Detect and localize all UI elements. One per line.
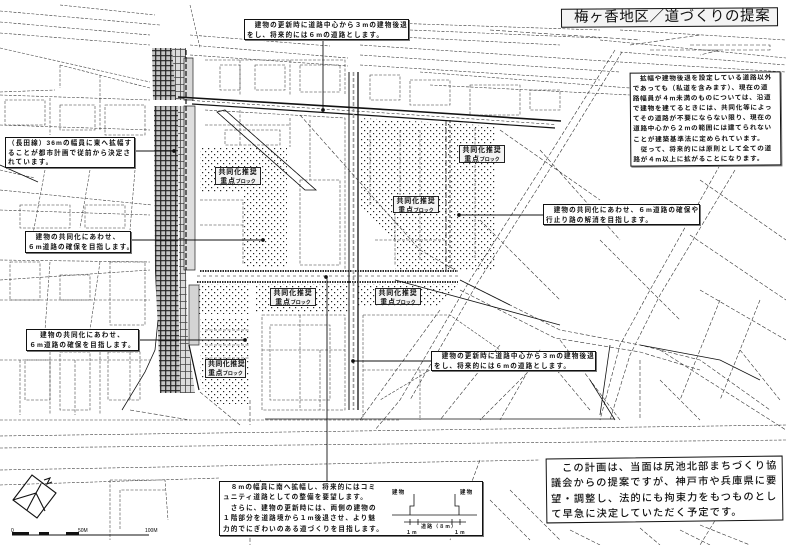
leader lines [131, 39, 543, 481]
callout: top road setback [244, 19, 409, 40]
label: priority block 5: 共同化推奨 [378, 290, 418, 297]
label: priority block 2: 共同化推奨 [462, 147, 502, 154]
label: priority block 2 [459, 145, 505, 163]
callout: lower road setback: をし、将来的には６mの道路とします。 [434, 362, 571, 370]
callout: plan status note: て早急に決定していただく予定です。 [551, 507, 743, 521]
callout: narrow roads rule: 従って、将来的には原則として全ての道 [641, 145, 772, 153]
callout: plan status note: 議会からの提案ですが、神戸市や兵庫県に要 [551, 476, 778, 490]
callout: joint development west lower [26, 329, 139, 351]
callout: joint development west upper [25, 231, 131, 253]
map: east-west upper road [178, 97, 561, 128]
callout: top road setback: 建物の更新時に道路中心から３mの建物後退 [255, 22, 408, 29]
label: priority block 3: 共同化推奨 [396, 198, 436, 205]
map: dotted joint-development zones [199, 118, 496, 404]
scale bar: 50M [78, 528, 88, 534]
label: priority block 3 [393, 196, 439, 213]
callout: joint development west lower: 建物の共同化にあわせ、 [40, 332, 125, 339]
callout: narrow roads rule [630, 71, 781, 167]
callout: narrow roads rule: 道路中心から２mの範囲には建てられない [633, 125, 772, 133]
diagram: road cross-section: 建物 [392, 488, 405, 496]
callout: narrow roads rule: 路が４m以上に拡がることになります。 [633, 155, 764, 163]
scale bar: 100M [145, 528, 158, 534]
callout: narrow roads rule: 拡幅や建物後退を設定している道路以外 [640, 74, 772, 83]
callout: narrow roads rule: ことが建築基準法に定められています。 [633, 135, 765, 143]
label: priority block 4 [270, 288, 316, 306]
callout: Nagata line: ることが都市計画で従前から決定さ [8, 150, 131, 157]
scale bar: 0 [11, 528, 14, 534]
callout: community road with section diagram: １階部分を道路境から１m後退させ、より魅 [223, 515, 376, 522]
map: solid heavy street lines [0, 110, 760, 420]
map: Nagata line wide road band [122, 48, 199, 410]
scale bar [11, 528, 158, 535]
label: priority block 6: 共同化推奨 [208, 361, 245, 368]
callout: joint development west lower: ６m道路の確保を目指します。 [29, 342, 136, 349]
label: priority block 4: 共同化推奨 [274, 290, 312, 297]
callout: lower road setback: 建物の更新時に道路中心から３mの建物後退 [442, 353, 595, 360]
callout: plan status note [546, 456, 783, 523]
callout: community road with section diagram: ８mの幅員に南へ拡幅し、将来的にはコミ [231, 484, 376, 491]
callout: dead-end road: 行止り路の解消を目指します。 [546, 216, 653, 224]
map: east-west lower road [197, 271, 458, 282]
callout: community road with section diagram: ュニティ道路としての整備を要望します。 [223, 494, 368, 501]
icon: north arrow [13, 475, 56, 518]
callout: Nagata line: れています。 [8, 159, 53, 166]
callout: narrow roads rule: で建物を建てるときには、共同化等によっ [633, 105, 772, 113]
map: north-south road [349, 72, 450, 410]
label: priority block 1: 共同化推奨 [218, 169, 258, 176]
callout: plan status note: 望・調整し、法的にも拘束力をもつものとし [551, 491, 778, 505]
callout: Nagata line [5, 137, 135, 168]
label: priority block 1: 重点ブロック [220, 178, 256, 184]
callout: plan status note: この計画は、当面は尻池北部まちづくり協 [562, 461, 778, 474]
callout: dead-end road [543, 204, 700, 225]
callout: narrow roads rule: てその道路が不要にならない限り、現在の [633, 115, 772, 123]
diagram: road cross-section: 道路（８m） [421, 523, 457, 530]
callout: community road with section diagram: さらに、建物の更新時には、両側の建物の [231, 505, 377, 512]
callout: dead-end road: 建物の共同化にあわせ、６m道路の確保や [554, 207, 699, 214]
callout: Nagata line: （長田線）36mの幅員に東へ拡幅す [8, 140, 132, 147]
title: 梅ヶ香地区／道づくりの提案 [574, 8, 770, 26]
callout: narrow roads rule: であっても（私道を含みます）、現在の道 [633, 85, 768, 93]
label: priority block 6: 重点ブロック [208, 370, 243, 376]
map: diagonal streets on the east side [130, 30, 786, 545]
label: priority block 1 [215, 167, 261, 185]
diagram: road cross-section [392, 488, 477, 535]
label: priority block 4: 重点ブロック [275, 298, 311, 306]
label: priority block 5 [375, 288, 421, 305]
label: priority block 2: 重点ブロック [464, 156, 500, 162]
callout: narrow roads rule: 路幅員が４m未満のものについては、沿道 [633, 95, 771, 103]
callout: top road setback: をし、将来的には６mの道路とします。 [247, 32, 384, 38]
callout: community road with section diagram: 力的でにぎわいのある道づくりを目指します。 [223, 526, 384, 533]
callout: joint development west upper: 建物の共同化にあわせ、 [36, 234, 120, 241]
diagram: road cross-section: 建物 [460, 488, 473, 496]
map: whitened areas inside zones [287, 147, 395, 270]
callout: lower road setback [431, 351, 596, 371]
callout: community road with section diagram [219, 481, 483, 536]
label: priority block 6 [205, 359, 246, 378]
